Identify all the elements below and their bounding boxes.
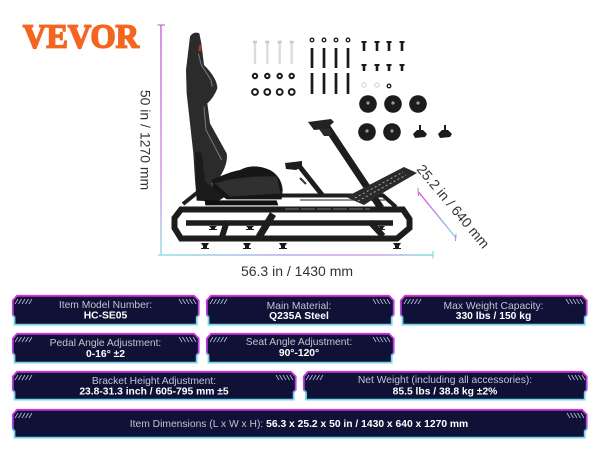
spec card: bracket height: 23.8-31.3 inch / 605-795 mm ±5 [79,386,229,398]
shifter mount [285,161,323,196]
pedal plate [346,167,417,205]
knobs [413,125,452,138]
material text: Main Material: [267,301,331,312]
net weight text: Net Weight (including all accessories): [358,375,532,386]
washers [252,38,391,95]
depth label: 25.2 in / 640 mm [414,161,493,251]
rubber feet [358,95,427,141]
base frame [174,192,410,238]
frame feet [201,226,401,249]
spec card: main material [207,296,394,325]
cockpit product image [174,33,417,249]
white bolts [253,42,294,64]
spec card: seat angle [207,334,394,363]
spec card: seat angle: 90°-120° [279,348,319,359]
racing seat [186,33,283,205]
spec card: net weight [304,372,587,400]
spec card: bracket height [13,372,296,400]
height label: 50 in / 1270 mm [138,90,154,190]
bracket height text: Bracket Height Adjustment: [92,376,216,387]
spec card: max weight capacity [401,296,587,325]
spec card: main material: Q235A Steel [269,311,329,322]
hardware kit [252,38,452,141]
model number text: Item Model Number: [59,300,152,311]
spec card: pedal angle: 0-16° ±2 [86,349,125,360]
grey washers [362,83,379,87]
pedal angle text: Pedal Angle Adjustment: [50,338,161,349]
seat angle text: Seat Angle Adjustment: [246,337,352,348]
black long bolts [312,48,348,94]
dimensions text: Item Dimensions (L x W x H): 56.3 x 25.2 x 50 in / 1430 x 640 x 1270 mm [130,419,468,430]
spec card: item model number: HC-SE05 [84,310,128,322]
spec card: max weight capacity: 330 lbs / 150 kg [456,311,531,322]
width label: 56.3 in / 1430 mm [241,263,353,279]
spec card: net weight: 85.5 lbs / 38.8 kg ±2% [393,386,497,398]
steering column [308,119,381,208]
capacity text: Max Weight Capacity: [444,301,543,312]
black short screws [362,41,404,71]
depth dimension [414,161,493,251]
spec card: pedal angle [13,334,199,363]
logo: VEVOR: VEVOR [23,18,139,56]
spec card: item dimensions [13,410,587,438]
spec card: item model number [13,296,199,325]
